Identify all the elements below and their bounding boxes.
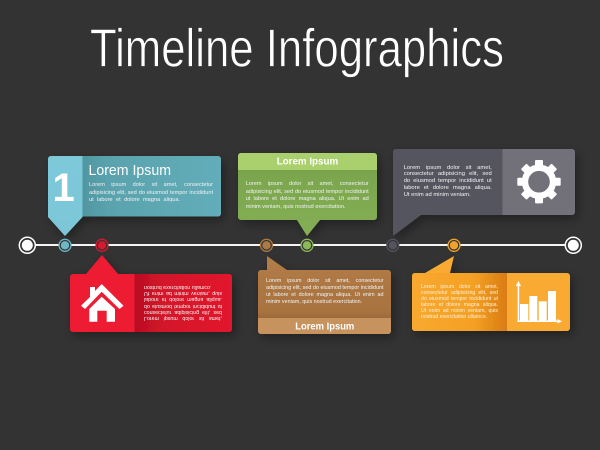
icon: bar chart [516, 281, 562, 324]
body text: adipisicing elit, sed do eiusmod tempor incididunt [89, 190, 213, 196]
body text: minim veniam, quis nostrud exercitation. [266, 299, 362, 305]
mirrored body text: consectetur adipisicing elit, sed [144, 309, 222, 315]
timeline axis [19, 237, 581, 253]
icon: house [81, 284, 124, 322]
body text [421, 284, 498, 321]
body text [404, 164, 492, 200]
body text: adipisicing elit, sed do eiusmod tempor incididunt [246, 189, 369, 195]
mirrored body text: nostrud exercitation ullamco. [144, 284, 211, 290]
body text: Lorem ipsum dolor sit amet, consectetur [266, 278, 384, 284]
mirrored body text: labore et dolore magna aliqua. [144, 297, 222, 303]
node: brown [260, 239, 272, 251]
body text: ut labore et dolore magna aliqua. Ut enim ad [246, 196, 369, 202]
body text [89, 182, 213, 205]
heading: Lorem Ipsum [277, 155, 338, 167]
panel: red home [70, 239, 232, 332]
mirrored body text [144, 284, 222, 321]
title: Timeline Infographics [90, 18, 504, 78]
mirrored body text: Ut enim ad minim veniam, quis [144, 290, 222, 296]
body text: ut labore et dolore magna aliqua. [89, 197, 180, 203]
body text: Lorem ipsum dolor sit amet, consectetur [246, 181, 369, 187]
body text: ut labore et dolore magna aliqua. Ut enim ad [266, 292, 384, 298]
node: teal [59, 239, 71, 251]
panel: teal step 1 [48, 156, 221, 251]
body text: Lorem ipsum dolor sit amet, [421, 284, 498, 290]
body text: do eiusmod tempor incididunt ut [421, 296, 498, 302]
body text [246, 181, 369, 211]
body text: labore et dolore magna aliqua. [421, 302, 498, 308]
panel: gray settings [387, 149, 575, 251]
start node [19, 237, 35, 253]
node: red [96, 239, 108, 251]
panel: brown [258, 239, 391, 334]
mirrored body text: do eiusmod tempor incididunt ut [144, 303, 222, 309]
end node [565, 237, 581, 253]
panel: green [238, 153, 377, 251]
body text: do eiusmod tempor incididunt ut [404, 178, 492, 184]
body text: adipisicing elit, sed do eiusmod tempor incididunt [266, 285, 384, 291]
body text: Ut enim ad minim veniam. [404, 192, 471, 198]
node: orange [448, 239, 460, 251]
body text: Ut enim ad minim veniam, quis [421, 308, 498, 314]
body text: minim veniam, quis nostrud exercitation. [246, 204, 346, 210]
node: green [301, 239, 313, 251]
body text: Lorem ipsum dolor sit amet, consectetur [89, 182, 213, 188]
body text [266, 278, 384, 307]
body text: consectetur adipisicing elit, sed [404, 171, 492, 177]
mirrored body text: Lorem ipsum dolor sit amet, [144, 315, 222, 321]
node: gray [387, 239, 399, 251]
body text: labore et dolore magna aliqua. [404, 185, 492, 191]
heading: Lorem Ipsum [88, 162, 171, 179]
body text: consectetur adipisicing elit, sed [421, 290, 498, 296]
heading: Lorem Ipsum [295, 320, 354, 332]
number 1: 1 [52, 166, 75, 210]
panel: orange chart [412, 239, 570, 331]
body text: Lorem ipsum dolor sit amet, [404, 164, 492, 170]
icon: gear [517, 160, 561, 203]
body text: nostrud exercitation ullamco. [421, 314, 487, 320]
